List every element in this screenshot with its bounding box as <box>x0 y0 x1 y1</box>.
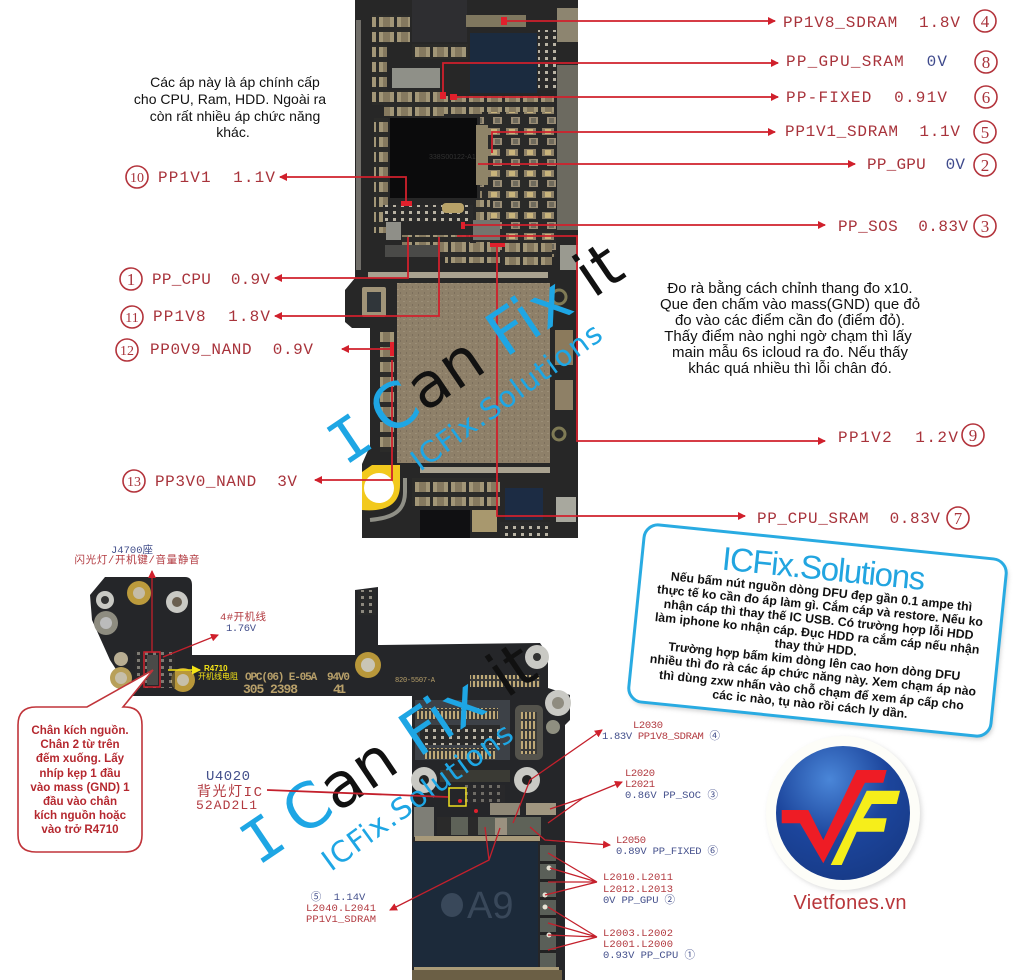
callout: power trigger pin: đầu vào chân <box>43 795 117 808</box>
label PP_CPU_SRAM: PP_CPU_SRAM 0.83V <box>757 510 940 528</box>
label L2020 group <box>625 768 718 802</box>
note body: Nếu bấm nút nguồn dòng DFU đẹp gần 0.1 ampe thì <box>670 569 973 614</box>
label L2020 group: L2021 <box>625 779 655 791</box>
top red probe lines <box>275 17 855 516</box>
flex connector labels: J4700座 <box>111 543 153 557</box>
label L2050 group: L2050 <box>616 835 646 847</box>
callout: power trigger pin: kích nguồn hoặc <box>34 809 127 822</box>
label PP-FIXED <box>786 86 997 108</box>
top right voltage labels <box>757 10 997 529</box>
note: main rails: cho CPU, Ram, HDD. Ngoài ra <box>134 91 326 107</box>
callout: power trigger pin: vào trở R4710 <box>41 823 119 836</box>
label PP1V8_SDRAM: PP1V8_SDRAM 1.8V <box>783 14 960 32</box>
label U4020 <box>196 769 262 813</box>
note: main rails: Các áp này là áp chính cấp <box>150 74 320 90</box>
flex connector labels: 开机线电阻 <box>198 671 238 682</box>
flex connector labels: 4#开机线 <box>220 610 266 624</box>
label PP_SOS <box>838 215 996 237</box>
callout: power trigger pin: vào mass (GND) 1 <box>30 781 130 794</box>
label PP_GPU <box>867 154 996 176</box>
label PP1V1 <box>126 166 275 188</box>
label L2010 group: L2010.L2011 <box>603 872 673 884</box>
label U4020: U4020 <box>206 769 250 785</box>
bottom watermark: I <box>229 802 301 883</box>
label PP1V2: PP1V2 1.2V <box>838 429 958 447</box>
label U4020: 背光灯IC <box>197 784 262 801</box>
note: measuring method <box>660 280 920 377</box>
label PP_CPU: PP_CPU 0.9V <box>152 271 270 289</box>
label PP0V9_NAND <box>116 339 313 361</box>
label U4020: 52AD2L1 <box>196 798 257 813</box>
note: measuring method: đo vào các điểm cần đo (điểm đỏ). <box>675 312 905 329</box>
note body: nhận cáp thì thay thế IC USB. Có trường hợp lỗi HDD <box>663 596 974 642</box>
note body: các ic nào, tụ nào rồi cách ly dần. <box>712 687 908 721</box>
bottom annotation arrows <box>144 571 622 950</box>
note: measuring method: Que đen chấm vào mass(GND) que đỏ <box>660 296 920 313</box>
bottom watermark url: ICFix.Solutions <box>315 716 520 878</box>
label L2050 group <box>616 835 718 858</box>
flex connector labels: 1.76V <box>226 623 257 635</box>
label PP1V1_SDRAM: PP1V1_SDRAM 1.1V <box>785 123 960 141</box>
label L2003 group <box>603 928 696 962</box>
label PP_SOS: 3 <box>981 217 989 236</box>
label L2040 group: L2040.L2041 <box>306 903 376 915</box>
label PP0V9_NAND: PP0V9_NAND 0.9V <box>150 341 313 359</box>
label L2030 group: 1.83V PP1V8_SDRAM ④ <box>602 730 720 743</box>
label PP_SOS: PP_SOS 0.83V <box>838 218 968 236</box>
top watermark: I <box>316 402 388 483</box>
note body: thay thử HDD. <box>774 636 858 659</box>
bottom circuit board: A9 <box>467 885 513 927</box>
bottom watermark: Can Fix it <box>269 628 549 850</box>
bottom circuit board: OPC(06) E-05A 94V0 <box>245 672 350 684</box>
label PP3V0_NAND: 13 <box>127 475 141 490</box>
top watermark: Can Fix it <box>356 228 636 450</box>
bottom circuit board: 305 2398 <box>243 682 298 697</box>
note: main rails: còn rất nhiều áp chức năng <box>150 108 320 124</box>
label PP3V0_NAND <box>123 470 297 492</box>
label PP1V1_SDRAM <box>785 121 996 143</box>
callout: power trigger pin: nhíp kẹp 1 đầu <box>39 767 121 780</box>
label PP1V1: 10 <box>130 171 144 186</box>
note body: thực tế ko cần đo áp làm gì. Cắm cáp và restore. Nếu ko <box>656 581 984 629</box>
top circuit board <box>345 0 578 538</box>
note body: làm iphone ko nhận cáp. Đục HDD ra cắm cáp nếu nhận <box>654 609 980 657</box>
note body: thì dùng zxw nhấn vào chỗ chạm để xem áp cấp cho <box>658 667 965 713</box>
label PP_CPU_SRAM: 7 <box>954 509 963 528</box>
label PP_GPU: 2 <box>981 156 989 175</box>
note: measuring method: Thấy điểm nào nghi ngờ chạm thì lấy <box>664 328 912 345</box>
bottom circuit board: 820-5507-A <box>395 677 436 685</box>
logo: Vietfones <box>766 736 922 914</box>
note body: Trường hợp bấm kim dòng lên cao hơn dòng DFU <box>668 640 961 683</box>
label PP3V0_NAND: PP3V0_NAND 3V <box>155 473 297 491</box>
flex connector labels <box>74 543 266 682</box>
label L2010 group: 0V PP_GPU ② <box>603 894 676 907</box>
note: measuring method: main mẫu 6s icloud ra đo. Nếu thấy <box>672 344 908 361</box>
label PP_GPU_SRAM: 8 <box>982 53 990 72</box>
label L2030 group: L2030 <box>633 720 663 732</box>
label PP1V8: PP1V8 1.8V <box>153 308 270 326</box>
label L2003 group: L2003.L2002 <box>603 928 673 940</box>
label PP-FIXED: PP-FIXED 0.91V <box>786 89 947 107</box>
callout: power trigger pin: Chân 2 từ trên <box>40 738 120 751</box>
label L2003 group: L2001.L2000 <box>603 939 673 951</box>
note: measuring method: khác quá nhiều thì lỗi chân đó. <box>688 360 892 377</box>
heading: ICFix.Solutions <box>720 540 927 597</box>
label PP1V1: PP1V1 1.1V <box>158 169 275 187</box>
note: main rails <box>134 74 326 140</box>
label PP1V2 <box>838 424 984 447</box>
callout: power trigger pin <box>18 670 153 852</box>
label PP1V8_SDRAM: 4 <box>981 12 990 31</box>
label PP1V8_SDRAM <box>783 10 996 32</box>
label L2040 group: PP1V1_SDRAM <box>306 914 376 926</box>
label PP_GPU_SRAM <box>786 51 997 73</box>
flex connector labels: 闪光灯/开机键/音量静音 <box>74 553 200 567</box>
label L2003 group: 0.93V PP_CPU ① <box>603 949 696 962</box>
flex connector labels: R4710 <box>204 664 228 673</box>
note: main rails: khác. <box>216 124 250 140</box>
callout: power trigger pin: đếm xuống. Lấy <box>36 752 125 765</box>
label L2010 group <box>603 872 676 907</box>
bottom circuit board <box>90 577 571 980</box>
label L2050 group: 0.89V PP_FIXED ⑥ <box>616 845 718 858</box>
top left voltage labels <box>116 166 313 492</box>
logo: Vietfones: Vietfones.vn <box>794 892 906 914</box>
label L2040 group: ⑤ 1.14V <box>311 891 366 904</box>
note body <box>646 568 986 728</box>
label PP1V1_SDRAM: 5 <box>981 123 989 142</box>
bottom circuit board: 41 <box>333 682 346 697</box>
note: measuring method: Đo rà bằng cách chỉnh thang đo x10. <box>667 280 913 297</box>
label L2030 group <box>602 720 720 743</box>
label PP0V9_NAND: 12 <box>120 344 134 359</box>
label L2040 group <box>306 891 376 926</box>
note body: nhiều thì đo rà các áp chức năng này. Xem chạm áp nào <box>649 652 977 699</box>
label PP_CPU: 1 <box>127 270 135 289</box>
callout: power trigger pin: Chân kích nguồn. <box>31 724 129 737</box>
label L2010 group: L2012.L2013 <box>603 884 673 896</box>
label PP-FIXED: 6 <box>982 88 990 107</box>
label PP_GPU: PP_GPU 0V <box>867 156 965 174</box>
label PP_CPU <box>120 268 270 290</box>
top watermark url: ICFix.Solutions <box>404 316 609 478</box>
label PP1V8: 11 <box>125 311 139 326</box>
label L2020 group: 0.86V PP_SOC ③ <box>625 789 718 802</box>
label L2020 group: L2020 <box>625 768 655 780</box>
label PP1V2: 9 <box>969 426 977 445</box>
label PP1V8 <box>121 306 270 328</box>
panel: ICFix.Solutions note <box>627 524 1010 741</box>
label PP_GPU_SRAM: PP_GPU_SRAM 0V <box>786 53 947 71</box>
top circuit board: 338S00122-A1 <box>429 154 476 161</box>
